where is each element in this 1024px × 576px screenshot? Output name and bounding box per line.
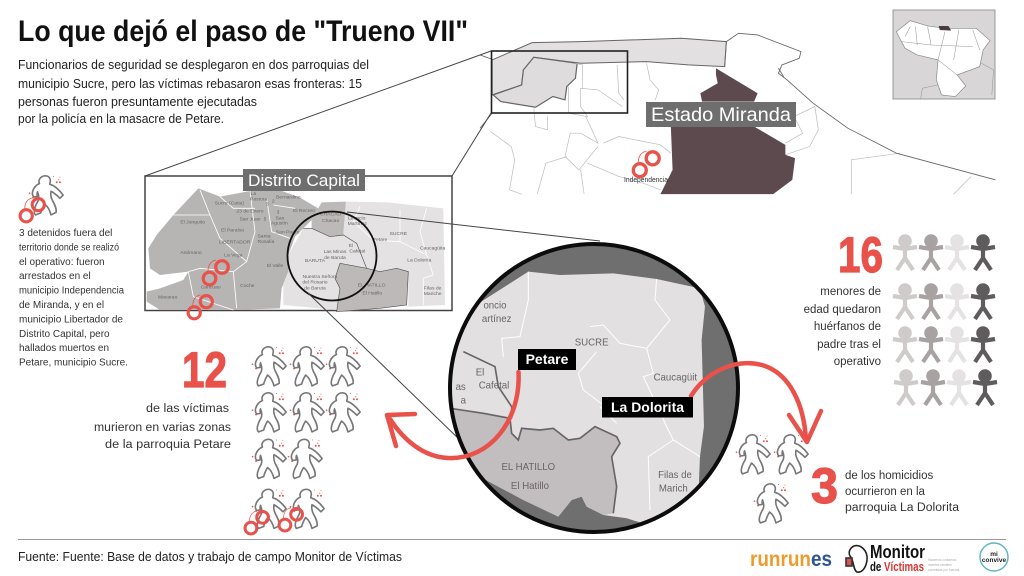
panel: Distrito Capital map: de Baruta bbox=[304, 285, 326, 291]
panel: zoomed map circle bbox=[440, 244, 738, 540]
text: detainees note: 3 detenidos fuera del bbox=[19, 228, 112, 239]
label: Distrito Capital: Distrito Capital bbox=[248, 172, 360, 190]
icon: body outline with handcuffs bbox=[20, 176, 63, 222]
panel: Distrito Capital map: EL HATILLO bbox=[358, 282, 386, 288]
panel: Distrito Capital map: 3 bbox=[266, 202, 269, 208]
panel: Distrito Capital map: Nuestra Señora bbox=[303, 274, 338, 280]
panel: Distrito Capital map: 2 bbox=[272, 198, 275, 204]
panel: Distrito Capital map: Agustín bbox=[271, 221, 288, 227]
panel: Distrito Capital map: La bbox=[251, 191, 256, 197]
map: Estado Miranda region bbox=[480, 33, 995, 194]
panel: Distrito Capital map: 5 bbox=[264, 216, 267, 222]
panel: Distrito Capital map: 3 bbox=[277, 210, 280, 216]
coast line bbox=[480, 33, 995, 180]
panel: Distrito Capital map: Caricuao bbox=[201, 285, 221, 291]
arrow: Petare to 12 victims bbox=[387, 372, 519, 458]
stat: 16 orphans: edad quedaron bbox=[804, 304, 881, 316]
stat: 12 victims bbox=[94, 342, 231, 451]
map: Baruta bbox=[283, 228, 367, 310]
panel: zoomed map circle: El bbox=[476, 367, 484, 378]
stat: 16 orphans: 16 bbox=[838, 227, 883, 283]
stat: 16 orphans: operativo bbox=[834, 356, 881, 368]
icons: 12 body outlines bbox=[245, 347, 360, 534]
map: Chacao bbox=[312, 202, 346, 237]
source text: Fuente: Fuente: Base de datos y trabajo de campo Monitor de Víctimas bbox=[18, 550, 402, 564]
text: detainees note: territorio donde se realizó bbox=[19, 242, 119, 253]
panel: Distrito Capital map: Mariche bbox=[424, 291, 442, 297]
panel: Distrito Capital map: Rosalía bbox=[258, 239, 275, 245]
panel: Distrito Capital map: de Baruta bbox=[324, 255, 346, 261]
panel: Distrito Capital map: Antímano bbox=[180, 250, 202, 256]
intro text block: por la policía en la masacre de Petare. bbox=[18, 112, 224, 126]
stat: 3 homicides bbox=[811, 458, 960, 514]
panel: Distrito Capital map: El bbox=[349, 243, 353, 249]
icons: 3 body outlines bbox=[736, 435, 808, 523]
panel: Distrito Capital map: 23 de Enero bbox=[236, 209, 264, 215]
stat: 12 victims: de la parroquia Petare bbox=[105, 439, 231, 451]
panel: Distrito Capital map: Petare bbox=[373, 237, 388, 243]
stat: 3 homicides: ocurrieron en la bbox=[845, 486, 926, 498]
panel: Distrito Capital map: La Dolorita bbox=[407, 257, 432, 263]
panel: Distrito Capital map: Martínez bbox=[348, 221, 368, 227]
stat: 3 homicides: de los homicidios bbox=[845, 470, 933, 482]
stat: 3 homicides: 3 bbox=[811, 458, 838, 514]
label: Independencia: Independencia bbox=[624, 175, 668, 184]
panel: Distrito Capital map: El Paraíso bbox=[221, 227, 244, 233]
intro text block: Funcionarios de seguridad se desplegaron en dos parroquias del bbox=[18, 58, 369, 72]
icon: handcuffs Libertador 2 bbox=[188, 295, 212, 319]
stat: 12 victims: de las víctimas bbox=[146, 403, 229, 415]
icons: 16 children bbox=[893, 234, 997, 405]
icon: handcuffs Independencia bbox=[633, 151, 659, 177]
logo: runrunes: runrunes bbox=[750, 548, 832, 571]
text: detainees note: de Miranda, y en el bbox=[19, 300, 104, 311]
panel: Distrito Capital map: Cafetal bbox=[349, 249, 365, 255]
panel: Distrito Capital map: Leoncio bbox=[348, 215, 366, 221]
label: Petare: Petare bbox=[526, 351, 569, 367]
panel: Distrito Capital map: Santa bbox=[257, 234, 271, 240]
logo: mi convive bbox=[980, 543, 1008, 571]
panel: Distrito Capital map: Las Minas bbox=[324, 249, 347, 255]
panel: zoomed map circle: EL HATILLO bbox=[501, 462, 556, 473]
text: detainees note: municipio Libertador de bbox=[19, 314, 123, 325]
zoom rectangle bbox=[492, 51, 628, 113]
panel: zoomed map circle: SUCRE bbox=[575, 337, 609, 348]
logo: Monitor de Víctimas: cometidas por fuerzas bbox=[928, 568, 960, 572]
logo: mi convive: convive bbox=[982, 557, 1006, 564]
panel: Distrito Capital map: San Juan bbox=[239, 216, 261, 222]
panel: zoomed map circle: Cafetal bbox=[479, 380, 509, 391]
intro text block bbox=[18, 58, 369, 126]
text: detainees note bbox=[19, 228, 128, 369]
intro text block: municipio Sucre, pero las víctimas rebasaron esas fronteras: 15 bbox=[18, 77, 362, 91]
panel: Distrito Capital map: Bernardino bbox=[276, 194, 301, 200]
connector lines: top map to district panel bbox=[145, 51, 491, 176]
stat: 12 victims: murieron en varias zonas bbox=[94, 422, 231, 434]
text: detainees note: municipio Independencia bbox=[19, 286, 124, 297]
panel: zoomed map circle: oncio bbox=[483, 300, 507, 311]
stat: 12 victims: 12 bbox=[182, 342, 227, 398]
label: Estado Miranda: Estado Miranda bbox=[651, 104, 791, 126]
text: detainees note: hallados muertos en bbox=[19, 343, 109, 354]
map: El Hatillo zoom bbox=[447, 408, 620, 517]
map: Sucre zoom bbox=[452, 272, 705, 522]
label: La Dolorita bbox=[602, 397, 693, 418]
panel: Distrito Capital map: Caucagüita bbox=[420, 246, 445, 252]
panel: zoomed map circle: as bbox=[456, 382, 466, 393]
logo: Monitor de Víctimas: Monitor bbox=[870, 542, 925, 562]
icon: foot tag bbox=[846, 546, 867, 572]
label: Petare bbox=[518, 349, 576, 370]
panel: Distrito Capital map: del Rosario bbox=[302, 280, 328, 286]
footer rule bbox=[18, 538, 1006, 540]
title: Lo que dejó el paso de "Trueno VII" bbox=[18, 15, 468, 48]
panel: zoomed map circle: Filas de bbox=[658, 470, 692, 481]
stat: 16 orphans: padre tras el bbox=[817, 339, 881, 351]
panel: Distrito Capital map: Pastora bbox=[250, 196, 267, 202]
text: detainees note: Petare, municipio Sucre. bbox=[19, 358, 128, 369]
logo: Monitor de Víctimas: de Víctimas bbox=[870, 560, 924, 574]
panel: Distrito Capital map: Coche bbox=[240, 283, 255, 289]
logo: Monitor de Víctimas: muertes también bbox=[928, 563, 952, 567]
Miranda dark area bbox=[660, 68, 795, 194]
text: detainees note: arrestados en el bbox=[19, 271, 91, 282]
panel: Distrito Capital map: San Pedro bbox=[276, 230, 300, 236]
arrow: La Dolorita to 3 homicides bbox=[691, 363, 821, 442]
panel: Distrito Capital map: El Hatillo bbox=[362, 291, 382, 297]
map: grey coastal band and Distrito Capital bbox=[492, 38, 726, 107]
panel: detainees note bbox=[19, 176, 128, 369]
panel: Distrito Capital map: El Valle bbox=[267, 263, 283, 269]
panel: zoomed map circle: Marich bbox=[659, 483, 688, 494]
panel: Distrito Capital map: Macarao bbox=[158, 295, 178, 301]
map: El Hatillo bbox=[335, 263, 408, 312]
logo: Monitor de Víctimas: Hacemos contamos bbox=[928, 558, 957, 562]
logo: Monitor de Víctimas bbox=[846, 542, 960, 574]
logo: mi convive: mi bbox=[990, 551, 998, 558]
text: detainees note: el operativo: fueron bbox=[19, 257, 105, 268]
label: La Dolorita: La Dolorita bbox=[611, 399, 684, 415]
panel: Distrito Capital map: Sucre (Catia) bbox=[215, 201, 244, 207]
panel: Distrito Capital map: LIBERTADOR bbox=[219, 239, 251, 245]
stat: 16 orphans: huérfanos de bbox=[814, 321, 881, 333]
panel: Distrito Capital map: La Vega bbox=[224, 252, 243, 258]
panel: zoomed map circle: a bbox=[461, 396, 467, 407]
panel: Distrito Capital map: CHACAO bbox=[320, 212, 341, 218]
small focus circle bbox=[288, 212, 376, 300]
map: Libertador bbox=[147, 188, 318, 310]
panel: Distrito Capital map: El Recreo bbox=[293, 208, 315, 214]
panel: Distrito Capital map: SUCRE bbox=[390, 231, 408, 237]
panel: zoomed map circle: Caucagüit bbox=[654, 373, 697, 384]
panel: Distrito Capital map: Chacao bbox=[322, 218, 339, 224]
intro text block: personas fueron presuntamente ejecutadas bbox=[18, 95, 257, 109]
map: Sucre bbox=[343, 202, 445, 307]
inset map of Venezuela bbox=[893, 10, 995, 99]
stat: 3 homicides: parroquia La Dolorita bbox=[845, 502, 960, 514]
icon: handcuffs Libertador 1 bbox=[203, 260, 228, 285]
stat: 16 orphans: menores de bbox=[820, 286, 881, 298]
panel: Distrito Capital map: El Junquito bbox=[180, 220, 205, 226]
panel: Distrito Capital map: San bbox=[276, 215, 285, 221]
panel: zoomed map circle: El Hatillo bbox=[511, 481, 549, 492]
panel: Distrito Capital map: Filas de bbox=[424, 285, 442, 291]
panel: Distrito Capital map: BARUTA bbox=[305, 258, 326, 264]
connector lines: focus circle to zoomed map bbox=[308, 212, 600, 442]
panel: Distrito Capital map bbox=[145, 169, 452, 319]
stat: 16 orphans bbox=[804, 227, 883, 368]
panel: zoomed map circle: artínez bbox=[482, 314, 512, 325]
text: detainees note: Distrito Capital, pero bbox=[19, 329, 110, 340]
